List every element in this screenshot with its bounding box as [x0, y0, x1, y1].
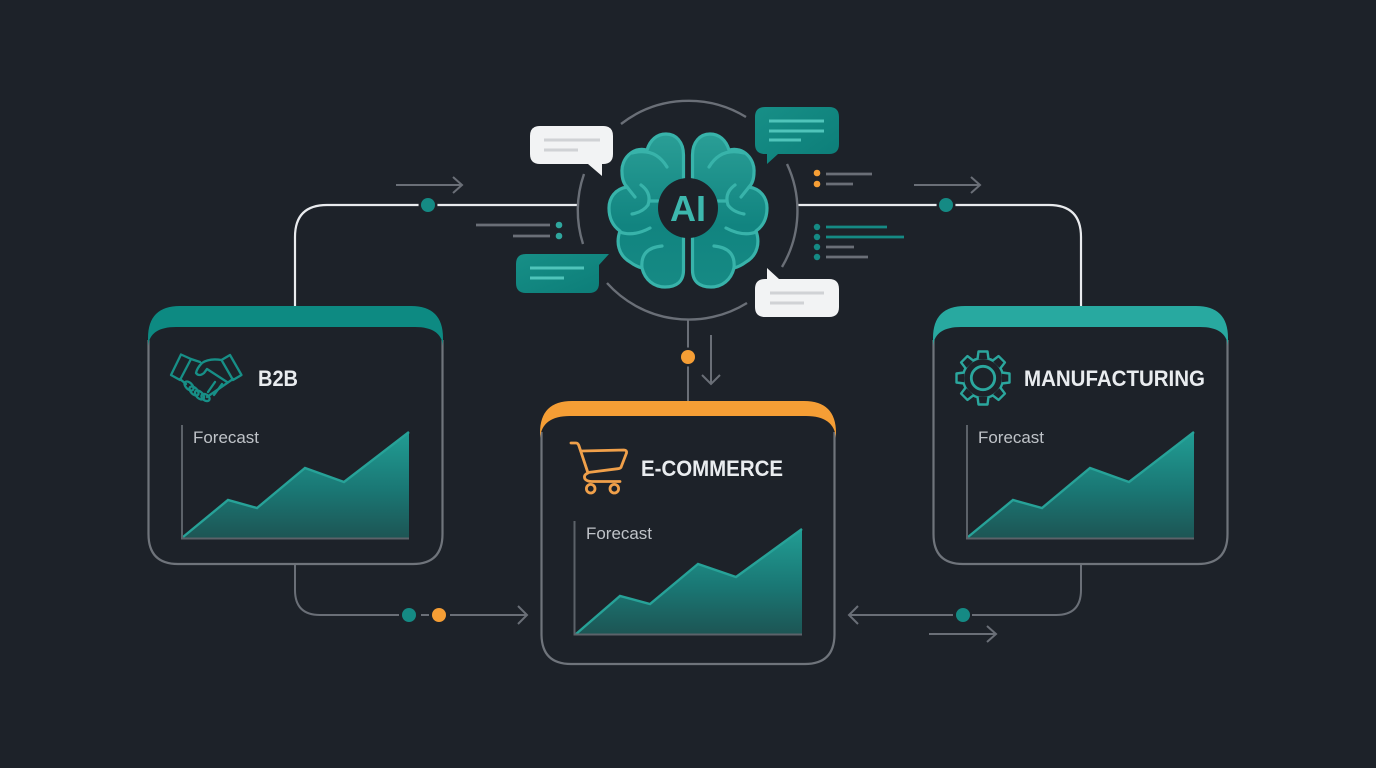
icon: shopping cart	[571, 443, 627, 493]
connector: B2B to E-commerce	[295, 564, 527, 624]
speech bubble: teal top right	[755, 107, 839, 164]
chart: forecast	[967, 425, 1194, 538]
chart: forecast	[182, 425, 409, 538]
orbit arcs	[578, 101, 797, 320]
panel top band	[540, 401, 836, 438]
right hemisphere	[692, 134, 767, 287]
panel border	[542, 432, 834, 664]
panel: Manufacturing	[933, 306, 1228, 564]
hub: AI brain	[578, 101, 797, 320]
speech bubble: teal bottom left	[516, 254, 609, 293]
connector: hub to E-commerce	[678, 320, 698, 401]
panel: E-commerce	[540, 401, 836, 664]
connector: hub to B2B	[295, 196, 578, 306]
chart: forecast: Forecast	[193, 428, 259, 447]
chart: forecast: Forecast	[978, 428, 1044, 447]
chart: forecast: Forecast	[586, 524, 652, 543]
panel border	[148, 340, 442, 564]
arrow: down to E-commerce	[702, 335, 720, 384]
heading: B2B	[258, 366, 298, 391]
speech bubble: white top left	[530, 126, 613, 176]
icon: handshake	[171, 354, 242, 403]
connector: Manufacturing to E-commerce	[849, 564, 1081, 624]
AI badge: AI	[670, 188, 706, 229]
chart: forecast	[574, 521, 802, 634]
connector: hub to Manufacturing	[798, 196, 1081, 306]
data lines: right teal	[814, 224, 904, 260]
panel border	[934, 340, 1228, 564]
data lines: right orange	[814, 170, 872, 187]
panel: B2B	[148, 306, 443, 564]
left hemisphere	[609, 134, 684, 287]
arrow: top left	[396, 177, 462, 193]
heading: E-COMMERCE	[641, 456, 783, 481]
icon: gear	[956, 352, 1010, 404]
AI badge	[658, 178, 718, 238]
arrow: top right	[914, 177, 980, 193]
arrow: bottom right	[929, 626, 996, 642]
heading: MANUFACTURING	[1024, 366, 1205, 391]
panel top band	[148, 306, 443, 346]
panel top band	[933, 306, 1228, 346]
icon: brain	[609, 134, 767, 287]
speech bubble: white bottom right	[755, 268, 839, 317]
data lines: left	[476, 222, 562, 239]
